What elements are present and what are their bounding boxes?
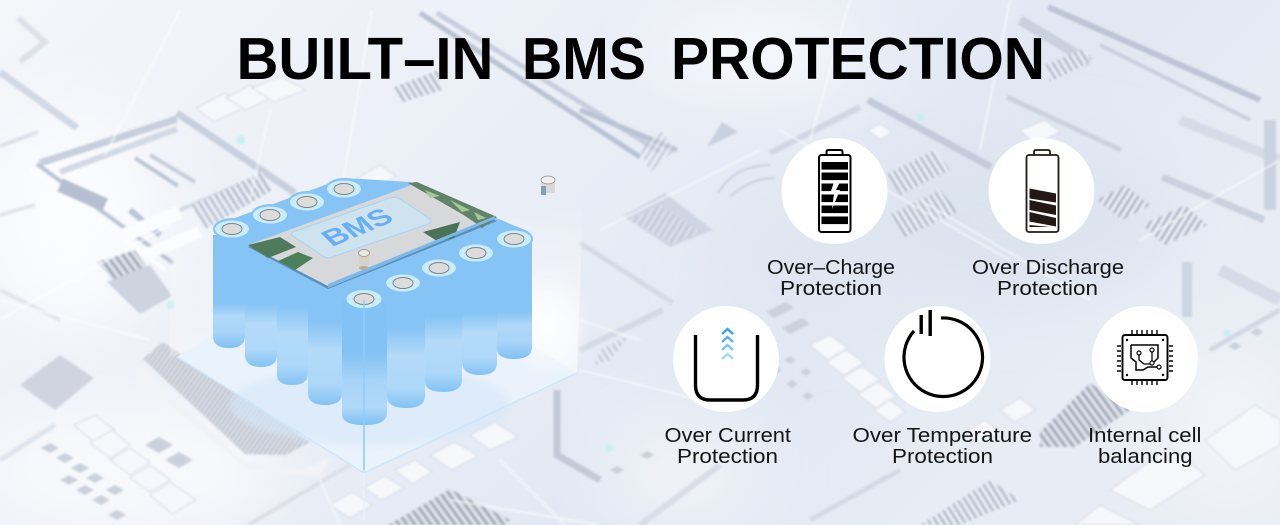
label xyxy=(1088,424,1202,468)
feature: over discharge protection xyxy=(972,138,1124,300)
label xyxy=(664,424,791,468)
title: BUILT–IN xyxy=(236,25,494,92)
label: Over Current xyxy=(664,424,791,447)
label xyxy=(972,256,1124,300)
label: Protection xyxy=(997,277,1098,300)
label: Protection xyxy=(780,277,882,300)
mounting bolt xyxy=(358,250,370,270)
label: Internal cell xyxy=(1088,424,1202,447)
triangle marker xyxy=(707,122,738,147)
CPU heat-sink mesh xyxy=(143,342,310,455)
BMS text: BMS xyxy=(315,203,400,251)
battery pack in glass cube xyxy=(170,176,593,520)
stand-off screw on board xyxy=(541,176,555,195)
glass cube front xyxy=(177,300,577,520)
feature: over current protection xyxy=(664,306,791,468)
icon: charged battery xyxy=(782,138,888,244)
socket frame xyxy=(40,119,177,163)
glass cube back walls xyxy=(170,178,583,373)
label: Protection xyxy=(677,445,778,468)
label: Over Temperature xyxy=(852,424,1032,447)
glass floor xyxy=(177,245,577,473)
label: Over–Charge xyxy=(767,256,895,279)
feature: internal cell balancing xyxy=(1088,306,1202,468)
title: PROTECTION xyxy=(671,25,1045,92)
icon: power ring xyxy=(884,306,990,412)
cell terminals xyxy=(215,180,531,308)
feature: over-charge protection xyxy=(767,138,895,300)
teal glints xyxy=(167,113,1230,452)
icon: low battery xyxy=(988,138,1094,244)
icon: microchip xyxy=(1092,306,1198,412)
pack top surface xyxy=(213,178,533,312)
label: Over Discharge xyxy=(972,256,1124,279)
label: balancing xyxy=(1098,445,1192,468)
label xyxy=(767,256,895,300)
label xyxy=(852,424,1032,468)
BMS circuit board xyxy=(248,182,497,289)
feature: over temperature protection xyxy=(852,306,1032,468)
dark component blocks xyxy=(41,302,1264,520)
label: Protection xyxy=(892,445,993,468)
BMS label panel xyxy=(292,197,431,258)
battery cells xyxy=(213,235,532,425)
title xyxy=(236,25,1045,92)
title: BMS xyxy=(522,25,646,92)
icon: current vessel with arrows xyxy=(673,306,779,412)
curved traces xyxy=(718,165,775,197)
